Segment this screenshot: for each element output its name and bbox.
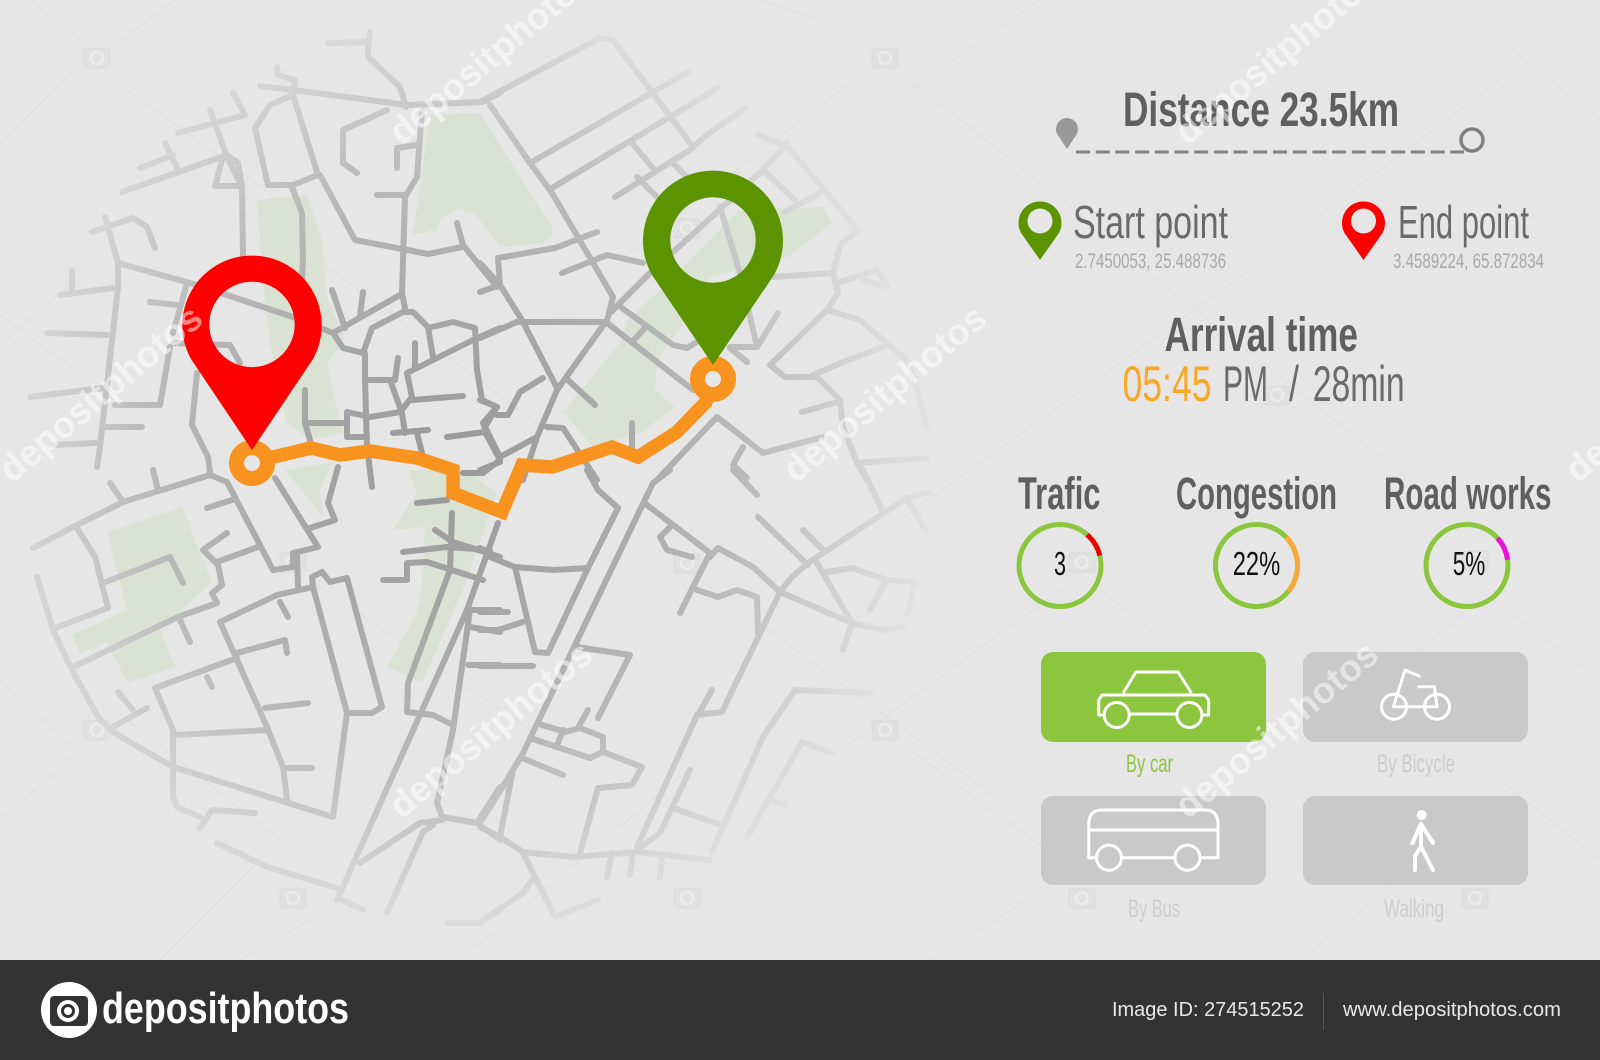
slash: / bbox=[1289, 356, 1299, 412]
panel: road works bbox=[1384, 468, 1552, 606]
icon: green pin bbox=[1018, 201, 1062, 260]
gauge arc: magenta bbox=[1498, 538, 1508, 560]
button: by bicycle bbox=[1303, 652, 1528, 778]
watermark text: depositphotos bbox=[1167, 633, 1386, 826]
gauge arc: red bbox=[1087, 535, 1100, 556]
label: by bus: By Bus bbox=[1128, 895, 1180, 923]
button: by bus bbox=[1041, 796, 1266, 923]
heading: distance: Distance 23.5km bbox=[1123, 84, 1399, 137]
heading: congestion: Congestion bbox=[1176, 468, 1337, 519]
label: by bicycle: By Bicycle bbox=[1377, 750, 1455, 778]
ring gauge: trafic bbox=[1019, 524, 1101, 606]
start coordinates: 2.7450053, 25.488736 bbox=[1075, 250, 1226, 273]
ring gauge: road works bbox=[1426, 524, 1508, 606]
button: walking bbox=[1303, 796, 1528, 923]
icon: walking person bbox=[1412, 810, 1433, 870]
panel: distance bbox=[1056, 84, 1483, 152]
footer website: www.depositphotos.com bbox=[1342, 999, 1561, 1021]
trip duration: 28min bbox=[1313, 356, 1405, 412]
value: 3: 3 bbox=[1054, 545, 1066, 582]
value: 22%: 22% bbox=[1233, 545, 1280, 582]
heading: trafic: Trafic bbox=[1018, 468, 1100, 519]
panel: congestion bbox=[1176, 468, 1337, 606]
icon: green map pin bbox=[643, 171, 783, 365]
map: road network bbox=[30, 32, 930, 923]
watermark text: depositphotos bbox=[381, 633, 600, 826]
label: walking: Walking bbox=[1384, 895, 1444, 923]
value: 5%: 5% bbox=[1453, 545, 1485, 582]
icon: bicycle bbox=[1382, 670, 1450, 719]
arrival clock time: 05:45 bbox=[1122, 356, 1212, 412]
icon: footer logo bbox=[41, 982, 97, 1038]
panel: trafic bbox=[1018, 468, 1101, 606]
icon: destination circle bbox=[1461, 129, 1483, 151]
watermark text bbox=[0, 0, 1600, 826]
footer image id: Image ID: 274515252 bbox=[1112, 999, 1304, 1021]
watermark text: depositphotos bbox=[775, 297, 994, 490]
route line bbox=[252, 379, 713, 512]
icon: bus bbox=[1089, 810, 1218, 870]
icon: red map pin bbox=[182, 256, 322, 450]
panel: end point bbox=[1342, 196, 1544, 273]
end coordinates: 3.4589224, 65.872834 bbox=[1393, 250, 1544, 273]
arrival PM: PM bbox=[1223, 356, 1268, 412]
panel: arrival time bbox=[1122, 309, 1405, 412]
icon: red pin bbox=[1342, 201, 1385, 260]
heading: arrival time: Arrival time bbox=[1164, 309, 1358, 362]
map: parks bbox=[72, 113, 832, 683]
start marker ring bbox=[236, 448, 268, 478]
panel: start point bbox=[1018, 196, 1228, 273]
footer bar bbox=[0, 960, 1600, 1060]
end point label: End point bbox=[1398, 196, 1529, 248]
gauge arc: orange bbox=[1286, 537, 1298, 591]
button: by car bbox=[1041, 652, 1266, 778]
label: by car: By car bbox=[1126, 750, 1173, 778]
start point label: Start point bbox=[1073, 196, 1228, 248]
ring gauge: congestion bbox=[1216, 524, 1298, 606]
footer brand: depositphotos bbox=[102, 984, 349, 1033]
icon: car bbox=[1099, 672, 1209, 728]
dashed distance line bbox=[1076, 150, 1464, 154]
end marker ring bbox=[698, 364, 728, 394]
icon: small grey pin bbox=[1056, 118, 1078, 149]
